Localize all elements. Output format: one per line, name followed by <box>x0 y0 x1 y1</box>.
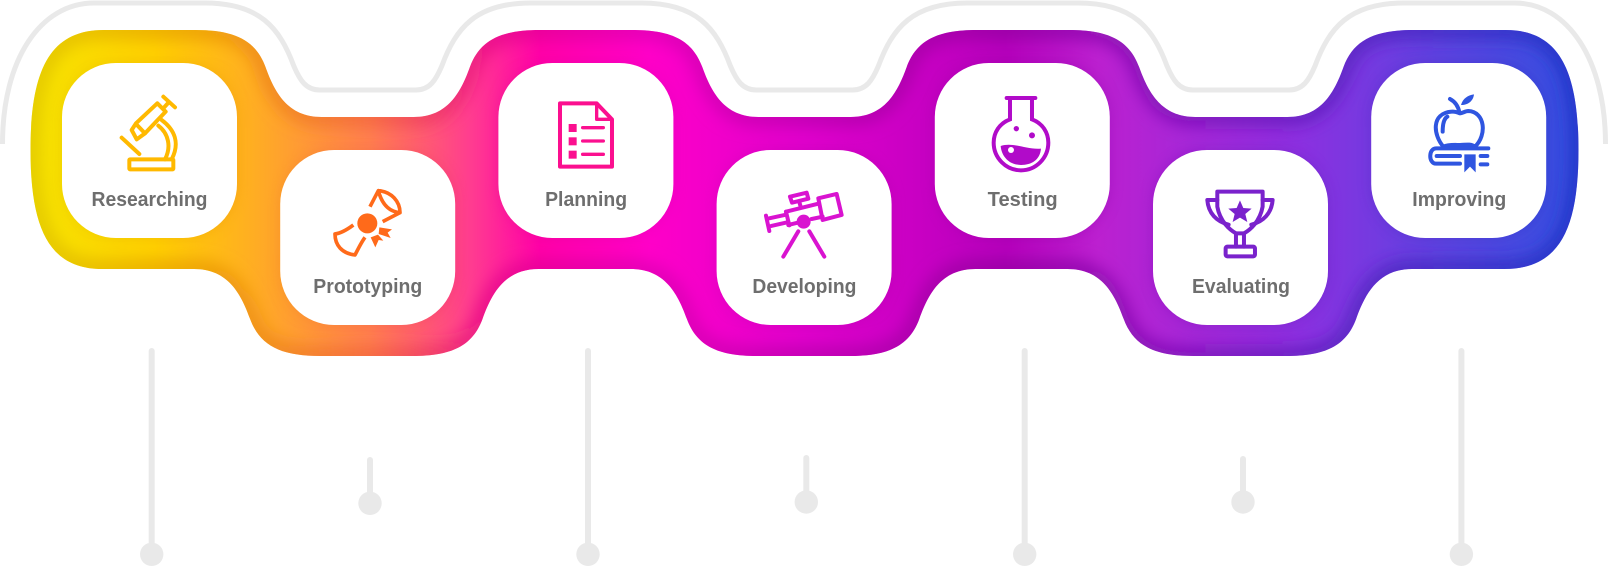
connector pin 3 <box>576 348 600 566</box>
card: Planning <box>498 63 673 238</box>
outer grey contour line <box>2 3 1606 144</box>
connector pin 6 <box>1231 456 1255 514</box>
icon: telescope <box>766 193 842 257</box>
icon: flask <box>994 98 1048 170</box>
label: Developing: Developing <box>752 276 856 298</box>
icon: apple on book <box>1430 94 1488 172</box>
label: Researching: Researching <box>92 189 208 211</box>
gradient ribbon band <box>28 28 1581 358</box>
connector pin 5 <box>1013 348 1036 566</box>
card: Evaluating <box>1153 150 1328 325</box>
label: Testing: Testing <box>988 189 1058 211</box>
connector pin 4 <box>795 455 818 514</box>
connector pin 2 <box>358 457 382 515</box>
card: Researching <box>62 63 237 238</box>
connector pin 7 <box>1450 348 1473 566</box>
icon: checklist document <box>560 103 612 167</box>
icon: trophy <box>1207 192 1273 256</box>
card: Developing <box>717 150 892 325</box>
card: Testing <box>935 63 1110 238</box>
card: Improving <box>1371 63 1546 238</box>
icon: diploma scroll <box>335 191 400 255</box>
label: Planning: Planning <box>545 189 627 211</box>
connector pin 1 <box>140 348 163 566</box>
label: Evaluating: Evaluating <box>1192 276 1290 298</box>
label: Improving: Improving <box>1412 189 1506 211</box>
label: Prototyping: Prototyping <box>313 276 422 298</box>
card: Prototyping <box>280 150 455 325</box>
icon: microscope <box>122 97 176 169</box>
